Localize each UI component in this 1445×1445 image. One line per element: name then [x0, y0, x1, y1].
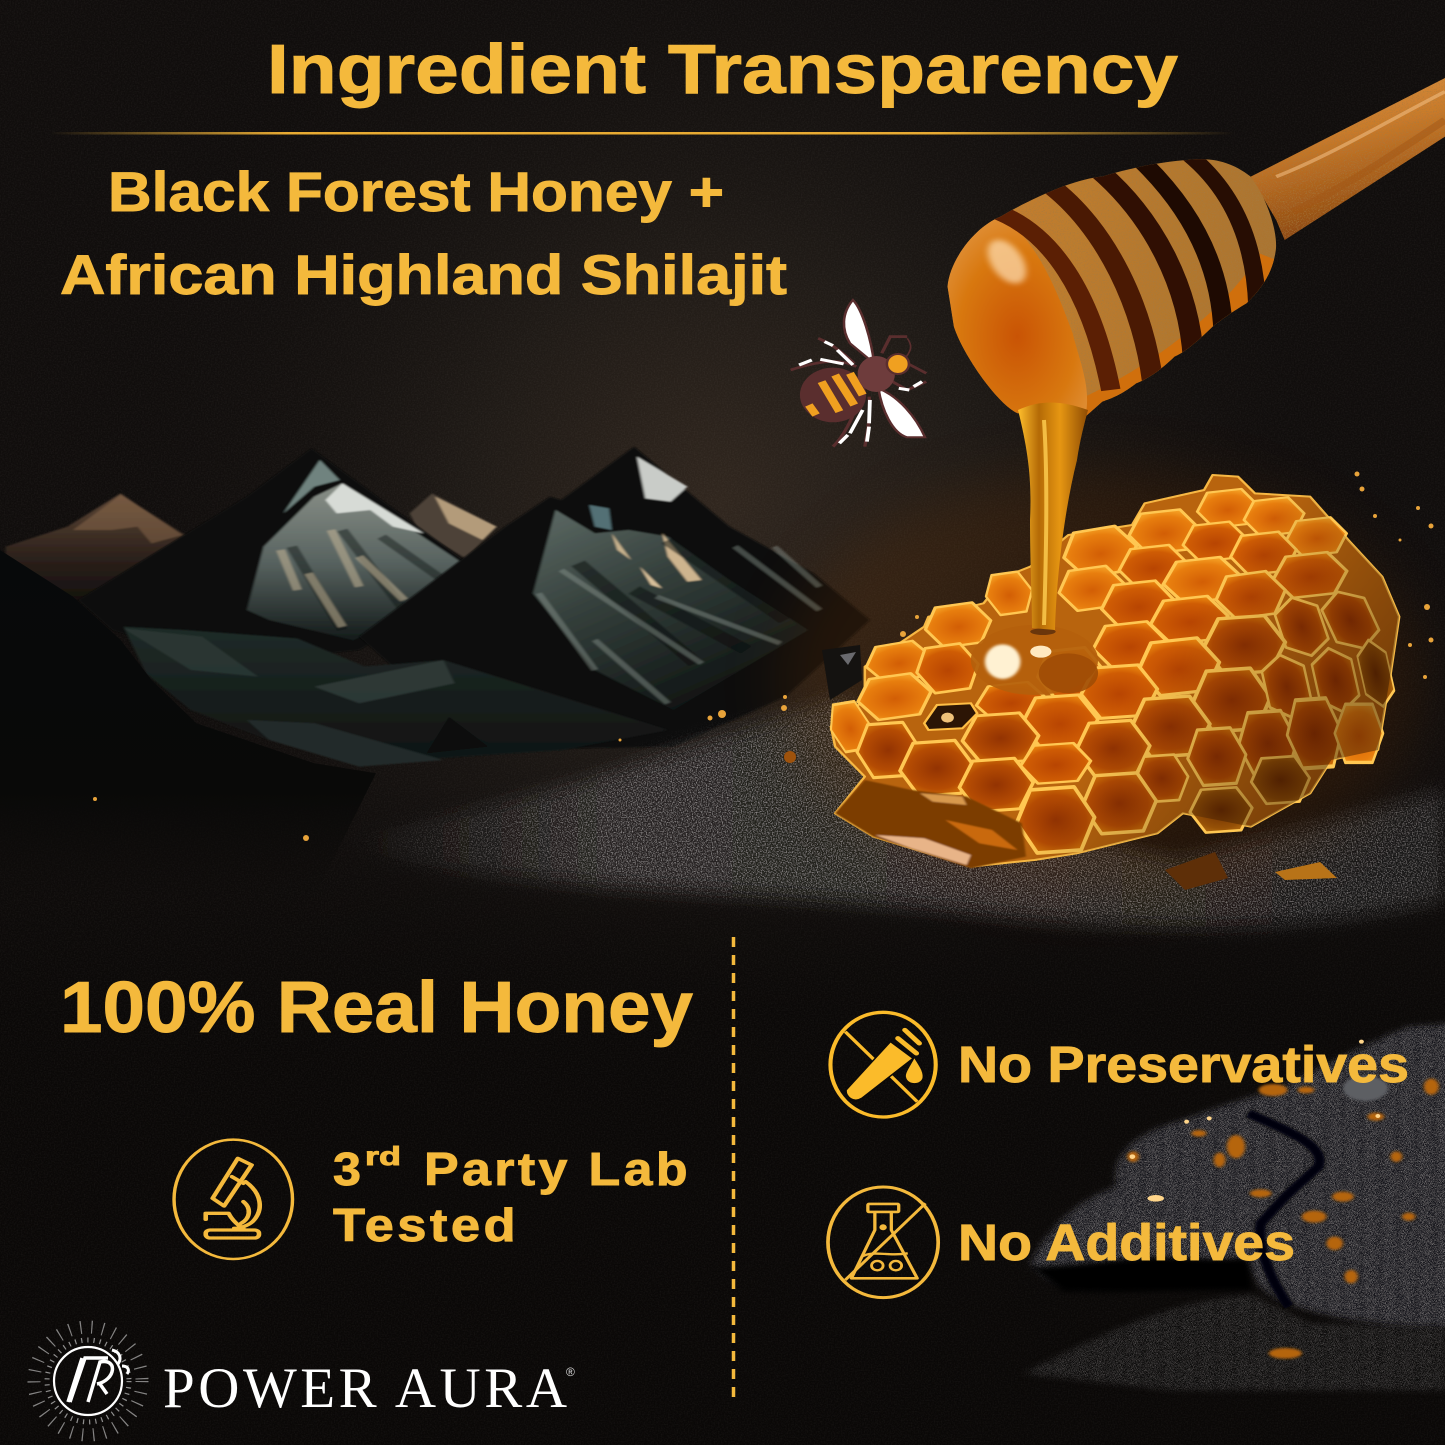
- dipper handle: [1251, 78, 1445, 240]
- honey spill at base: [835, 780, 1026, 868]
- right main mountain: [359, 447, 870, 750]
- lower rock streaks: [1022, 1295, 1445, 1390]
- subtitle: [60, 160, 787, 306]
- subtitle: African Highland Shilajit: [60, 243, 787, 306]
- ground: rocky shilajit terrain: [340, 695, 1445, 926]
- honey dipper: [941, 78, 1445, 420]
- title: Ingredient Transparency: [267, 30, 1178, 108]
- text: no additives: No Additives: [958, 1214, 1295, 1271]
- honeycomb glow: [780, 470, 1420, 890]
- text: 3rd party lab tested: 3: [333, 1143, 361, 1195]
- silver highlight: [1343, 1076, 1388, 1101]
- honey pool under drip: [971, 625, 1098, 695]
- heading: 100% real honey: 100% Real Honey: [60, 968, 693, 1048]
- dark rock near comb: [822, 645, 862, 700]
- comb body: [831, 475, 1399, 867]
- dipper grooves: [992, 155, 1257, 390]
- amber end of head: [948, 217, 1087, 417]
- bee legs: [791, 337, 926, 447]
- distant left peak: [6, 493, 185, 600]
- logo: power aura wordmark: ®: [566, 1365, 575, 1379]
- comb cells: [825, 487, 1398, 854]
- golden sparks: [93, 472, 1434, 890]
- dashed divider: [732, 937, 735, 1398]
- text: 3rd party lab tested: Tested: [333, 1199, 519, 1251]
- title divider rule: [50, 132, 1235, 134]
- main rock mass: [1030, 1023, 1445, 1327]
- bee wings: [844, 300, 925, 437]
- icon: no additives: [828, 1187, 938, 1298]
- logo: power aura emblem: [34, 1327, 142, 1435]
- dark foreground ridge: [0, 550, 376, 897]
- bee abdomen: [800, 368, 866, 422]
- dark crevice: [1030, 1257, 1252, 1292]
- shilajit rock: [1022, 1023, 1445, 1390]
- gold flecks: [1127, 1079, 1439, 1359]
- distant middle peak: [410, 493, 497, 558]
- text: 3rd party lab tested: rd: [365, 1141, 401, 1171]
- bee: [791, 300, 926, 447]
- amber lower rim: [1077, 260, 1276, 417]
- dipper head: [941, 153, 1285, 420]
- left main mountain: [79, 448, 466, 663]
- lower mountain folds: [123, 627, 668, 767]
- icon: microscope: [174, 1140, 293, 1259]
- bee head: [887, 338, 911, 374]
- bee thorax: [858, 356, 895, 392]
- logo: power aura wordmark: POWER AURA: [163, 1357, 567, 1420]
- honeycomb: [825, 475, 1399, 868]
- comb shadow side: [831, 475, 1399, 867]
- empty dark cell: [924, 703, 977, 730]
- mountains scene: [0, 447, 870, 897]
- text: no preservatives: No Preservatives: [958, 1036, 1409, 1093]
- subtitle: Black Forest Honey +: [108, 160, 724, 223]
- text: 3rd party lab tested: Party Lab: [424, 1143, 691, 1195]
- icon: no preservatives: [830, 1012, 936, 1117]
- text: 3rd party lab tested: [333, 1141, 691, 1251]
- rock folds: [1248, 1113, 1320, 1307]
- honey drip stream: [1018, 402, 1088, 630]
